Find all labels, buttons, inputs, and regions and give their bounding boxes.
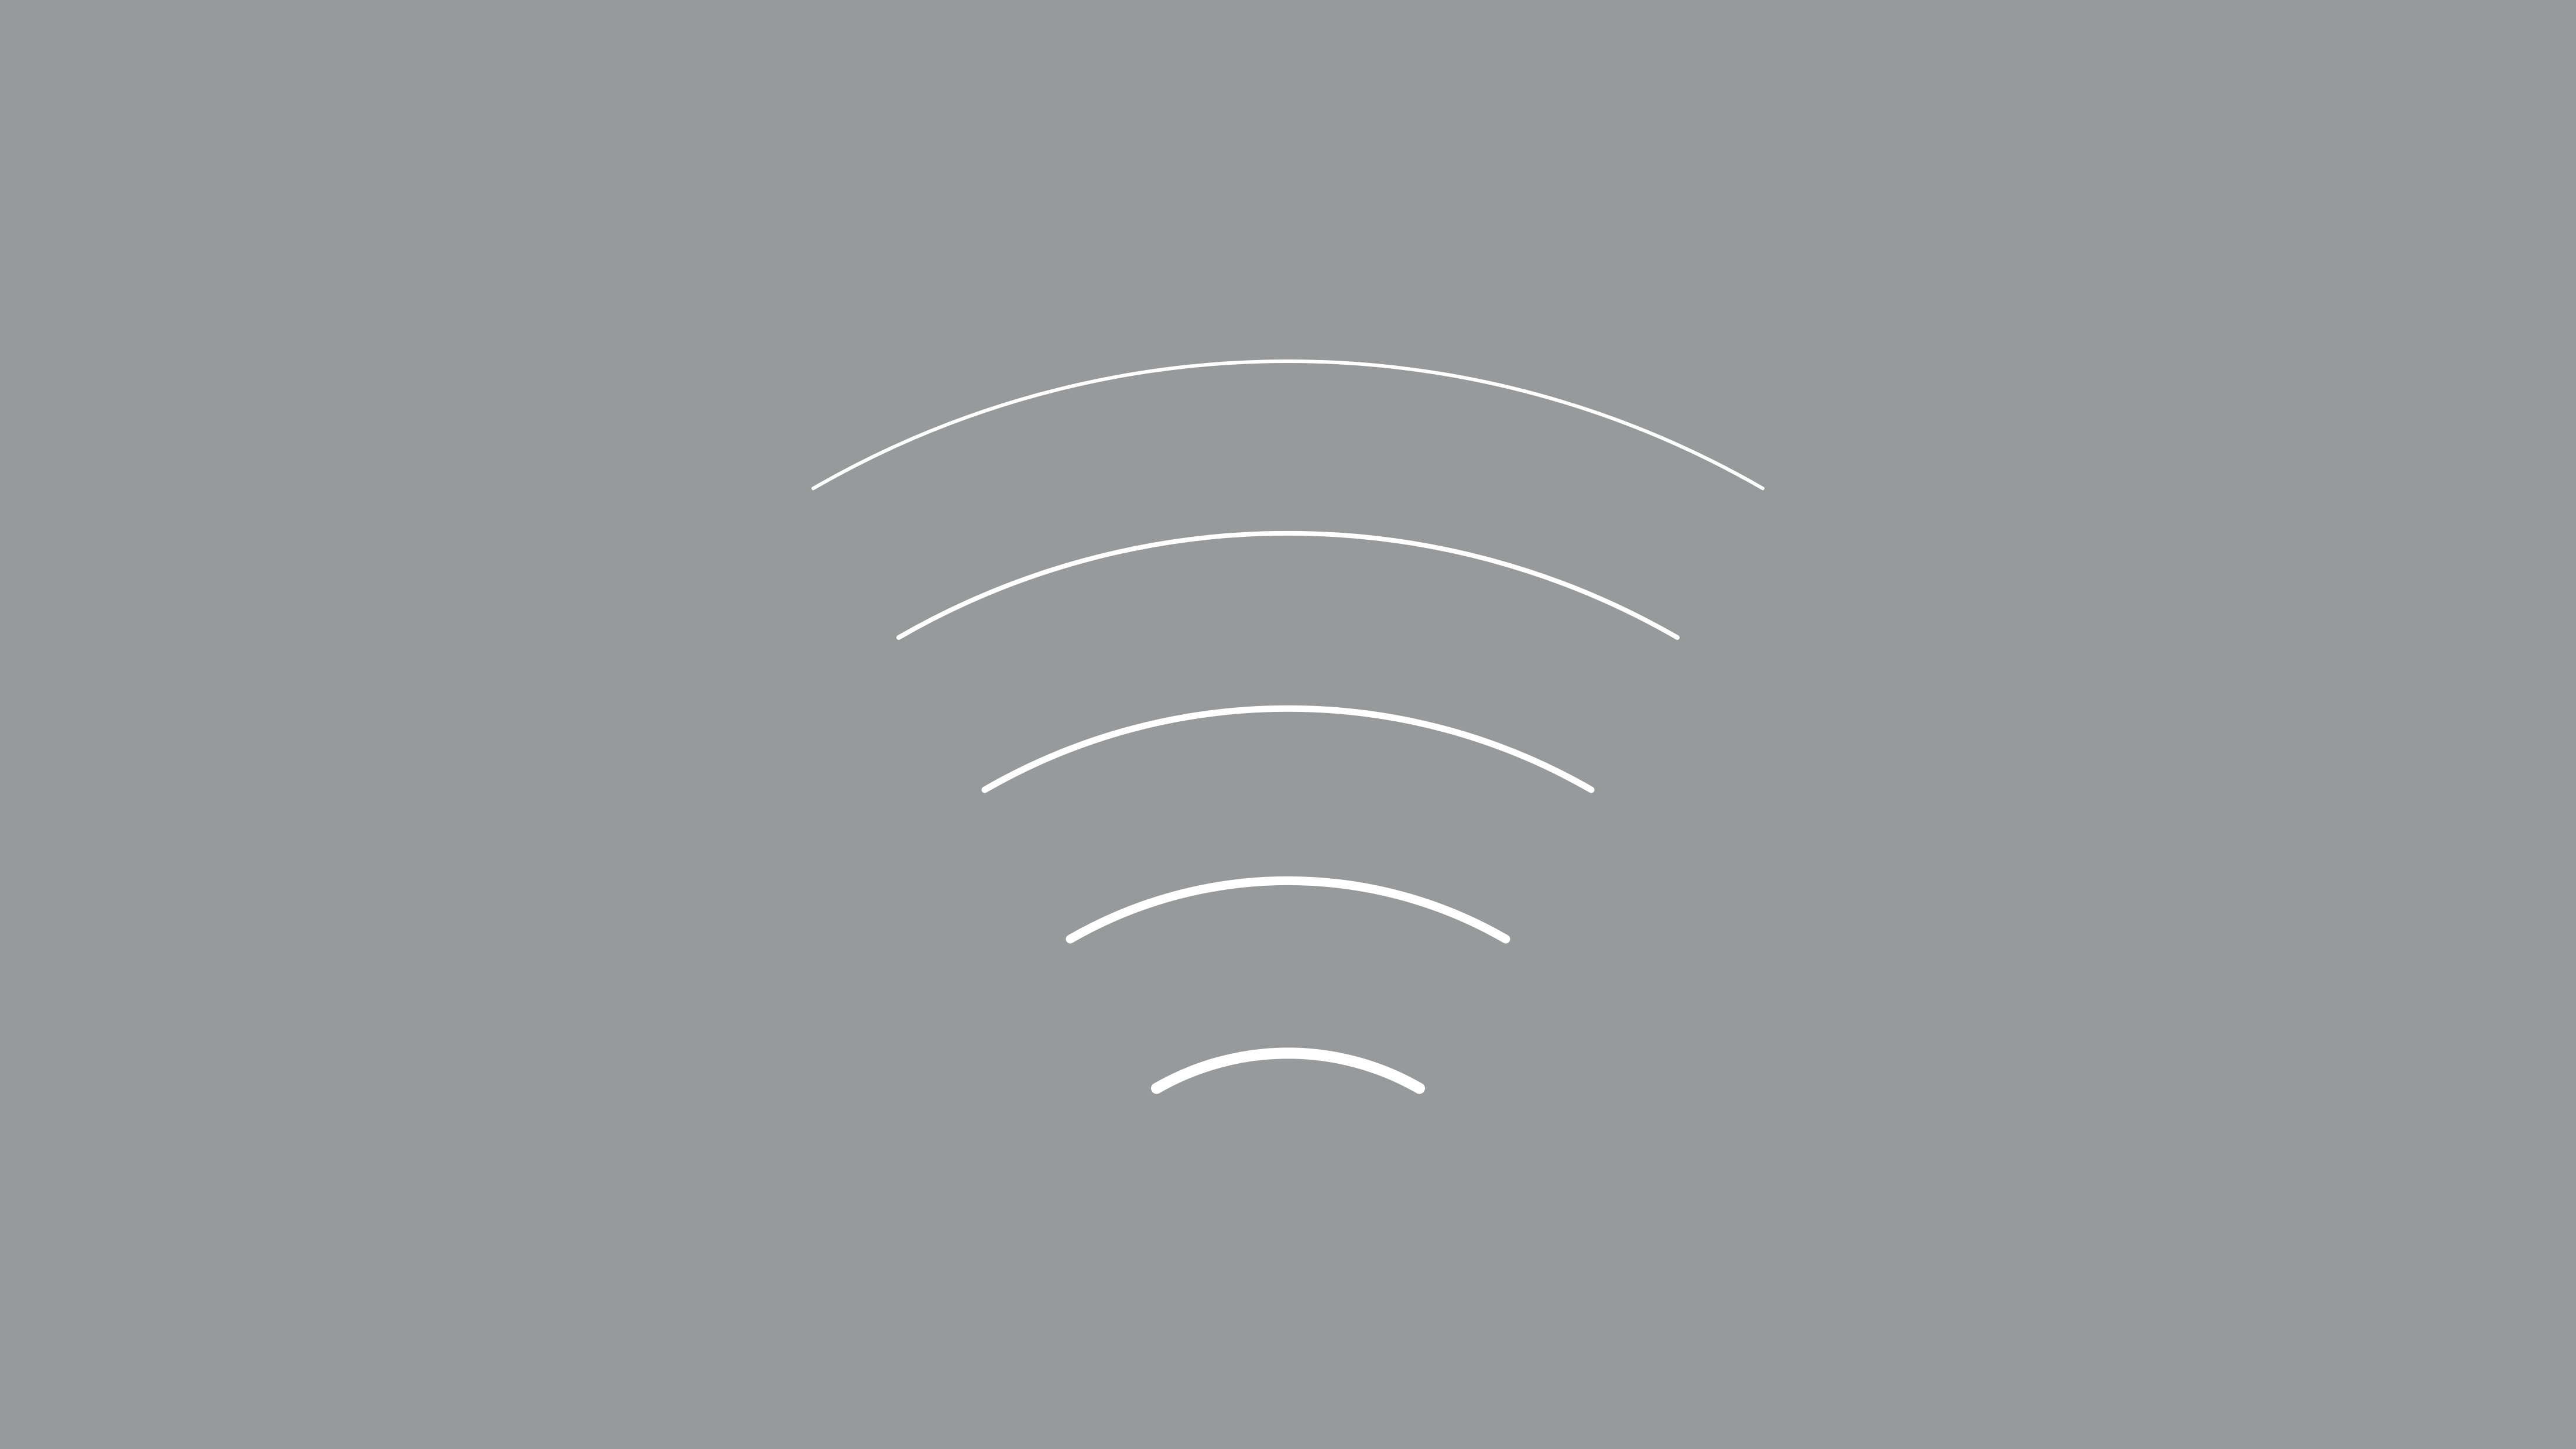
arc 2	[899, 533, 1677, 638]
icon: wireless signal arcs	[813, 361, 1763, 1088]
arc 3	[985, 708, 1591, 790]
arc 4	[1070, 881, 1506, 939]
arc 1 (outermost)	[813, 361, 1763, 488]
arc 5 (innermost)	[1157, 1053, 1419, 1088]
